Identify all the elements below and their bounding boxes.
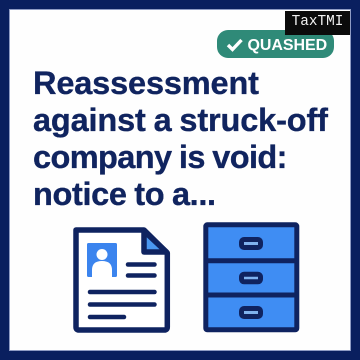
watermark: TaxTMI [285,11,350,35]
watermark: TaxTMI: TaxTMI [292,14,343,30]
title: against a struck-off [33,102,328,138]
status badge: quashed [217,30,334,58]
title: Reassessment [33,65,259,101]
title [33,65,328,212]
icon: document with profile photo [73,227,170,333]
icon: filing cabinet [203,222,300,332]
title: notice to a... [33,176,216,212]
title: company is void: [33,139,287,175]
status badge: quashed: QUASHED [248,36,327,54]
